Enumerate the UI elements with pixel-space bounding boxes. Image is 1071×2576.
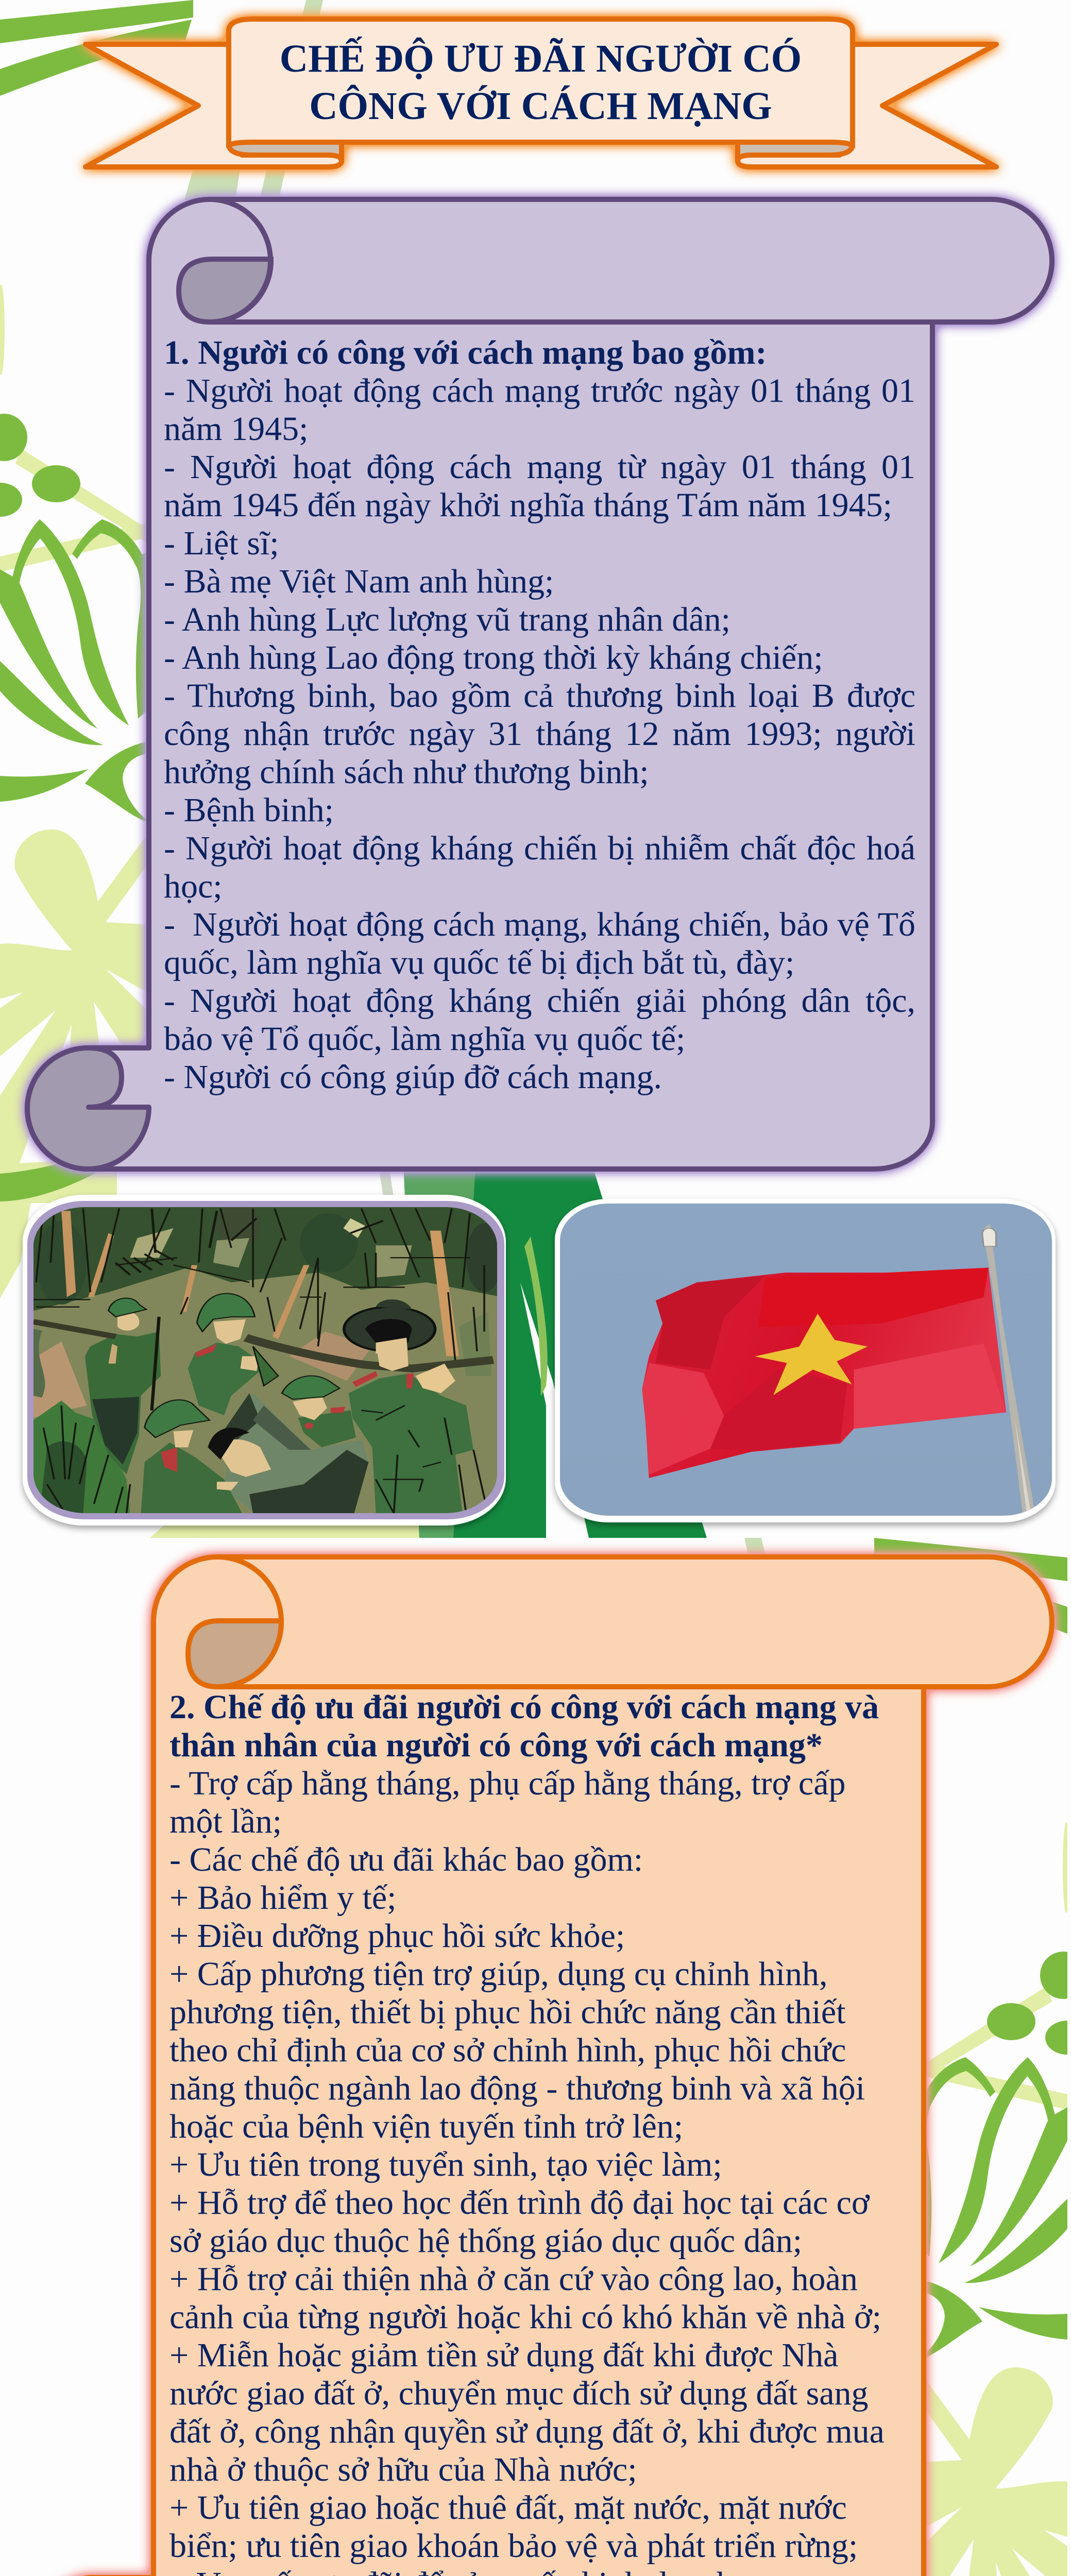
picture frame <box>555 1199 1056 1522</box>
scroll silhouette <box>33 1557 1052 2576</box>
title text: CÔNG VỚI CÁCH MẠNG <box>309 84 772 128</box>
section 2 list: + Bảo hiểm y tế; <box>169 1879 396 1917</box>
section 2 list: biển; ưu tiên giao khoán bảo vệ và phát triển rừng; <box>169 2527 858 2565</box>
picture: Vietnamese flag <box>555 1199 1056 1522</box>
section 1 list: hưởng chính sách như thương binh; <box>164 753 649 791</box>
section 2 list: + Cấp phương tiện trợ giúp, dụng cụ chỉnh hình, <box>169 1955 827 1993</box>
section 2 list: - Các chế độ ưu đãi khác bao gồm: <box>169 1841 643 1878</box>
ribbon left fold <box>229 142 342 161</box>
section 1 list: - Anh hùng Lực lượng vũ trang nhân dân; <box>164 601 730 638</box>
section 1 list: - Bà mẹ Việt Nam anh hùng; <box>164 563 554 600</box>
section 1 list: học; <box>164 868 223 905</box>
section 2 list: theo chỉ định của cơ sở chỉnh hình, phục hồi chức <box>169 2031 846 2069</box>
section 1 list: - Người hoạt động cách mạng trước ngày 01 tháng 01 <box>164 372 915 410</box>
flag star <box>755 1314 868 1395</box>
main pole <box>246 1338 494 1368</box>
rear pole <box>33 1321 115 1336</box>
top roll inner <box>179 259 271 322</box>
section 1 list: bảo vệ Tổ quốc, làm nghĩa vụ quốc tế; <box>164 1020 685 1058</box>
purple scroll panel <box>27 199 1052 1169</box>
section 1 heading: 1. Người có công với cách mạng bao gồm: <box>164 334 767 371</box>
section 1 list: - Thương binh, bao gồm cả thương binh loại B được <box>164 677 915 715</box>
section 1 list: quốc, làm nghĩa vụ quốc tế bị địch bắt tù, đày; <box>164 944 794 981</box>
section 2 list: cảnh của từng người hoặc khi có khó khăn về nhà ở; <box>169 2298 881 2336</box>
title ribbon banner <box>86 19 996 167</box>
big man <box>349 1374 473 1513</box>
hammock <box>224 1393 369 1512</box>
scroll silhouette <box>27 199 1052 1169</box>
section 2 heading: thân nhân của người có công với cách mạng* <box>169 1726 823 1764</box>
ribbon left tail <box>86 44 342 167</box>
section 1 list: - Người hoạt động kháng chiến giải phóng dân tộc, <box>164 982 915 1020</box>
section 2 list: năng thuộc ngành lao động - thương binh và xã hội <box>169 2070 865 2107</box>
middle man <box>188 1343 260 1415</box>
section 2 list: - Trợ cấp hằng tháng, phụ cấp hằng tháng, trợ cấp <box>169 1765 846 1802</box>
ribbon right fold <box>738 142 853 161</box>
section 1 list: năm 1945; <box>164 410 308 448</box>
section 2 list: + Ưu tiên trong tuyển sinh, tạo việc làm; <box>169 2146 722 2183</box>
section 2 heading: 2. Chế độ ưu đãi người có công với cách mạng và <box>169 1688 879 1726</box>
picture: soldiers carrying a wounded comrade <box>23 1195 506 1526</box>
section 2 list: + Hỗ trợ cải thiện nhà ở căn cứ vào công lao, hoàn <box>169 2260 858 2298</box>
section 2 list: sở giáo dục thuộc hệ thống giáo dục quốc dân; <box>169 2222 802 2260</box>
section 2 list: hoặc của bệnh viện tuyến tỉnh trở lên; <box>169 2108 683 2145</box>
illustration <box>29 1204 502 1516</box>
section 1 list: - Liệt sĩ; <box>164 524 279 562</box>
woman figure <box>85 1332 161 1475</box>
section 2 list: nhà ở thuộc sở hữu của Nhà nước; <box>169 2451 637 2488</box>
section 1 list: - Người hoạt động kháng chiến bị nhiễm chất độc hoá <box>164 829 915 867</box>
section 2 list: nước giao đất ở, chuyển mục đích sử dụng đất sang <box>169 2375 869 2412</box>
section 2 list: + Điều dưỡng phục hồi sức khỏe; <box>169 1917 625 1955</box>
bottom roll <box>27 1048 149 1169</box>
top roll front edge <box>210 199 991 322</box>
section 2 list: + Ưu tiên giao hoặc thuê đất, mặt nước, mặt nước <box>169 2489 847 2527</box>
section 2 list <box>169 1765 885 2576</box>
section 2 list: một lần; <box>169 1803 282 1840</box>
title text: CHẾ ĐỘ ƯU ĐÃI NGƯỜI CÓ <box>280 37 802 80</box>
section 1 list: - Người hoạt động cách mạng từ ngày 01 tháng 01 <box>164 448 915 486</box>
top roll front edge <box>217 1557 988 1687</box>
section 1 list: - Bệnh binh; <box>164 791 334 829</box>
section 1 text <box>164 334 915 1096</box>
section 2 text <box>169 1688 885 2576</box>
top roll inner <box>188 1621 281 1687</box>
orange scroll panel <box>33 1557 1052 2576</box>
section 2 heading <box>169 1688 879 1764</box>
ribbon centre panel <box>229 19 853 147</box>
section 1 list <box>164 372 915 1096</box>
title text <box>280 37 802 128</box>
small soldier <box>298 1411 356 1447</box>
section 1 list: - Anh hùng Lao động trong thời kỳ kháng chiến; <box>164 639 823 676</box>
wounded man <box>217 1439 271 1477</box>
section 2 list: phương tiện, thiết bị phục hồi chức năng cần thiết <box>169 1993 845 2031</box>
ribbon right tail <box>738 44 996 167</box>
section 1 list: năm 1945 đến ngày khởi nghĩa tháng Tám năm 1945; <box>164 486 892 524</box>
section 1 list: - Người có công giúp đỡ cách mạng. <box>164 1058 662 1096</box>
section 1 list: - Người hoạt động cách mạng, kháng chiến, bảo vệ Tổ <box>164 906 915 943</box>
section 2 list: + Hỗ trợ để theo học đến trình độ đại học tại các cơ <box>169 2184 870 2222</box>
kneeling soldier <box>141 1443 242 1513</box>
section 1 list: công nhận trước ngày 31 tháng 12 năm 1993; người <box>164 715 915 753</box>
flag photo <box>560 1204 1052 1516</box>
left bush <box>33 1400 130 1513</box>
section 2 list: đất ở, công nhận quyền sử dụng đất ở, khi được mua <box>169 2413 885 2450</box>
picture frame <box>23 1195 506 1526</box>
section 2 list: + Miễn hoặc giảm tiền sử dụng đất khi được Nhà <box>169 2336 838 2374</box>
